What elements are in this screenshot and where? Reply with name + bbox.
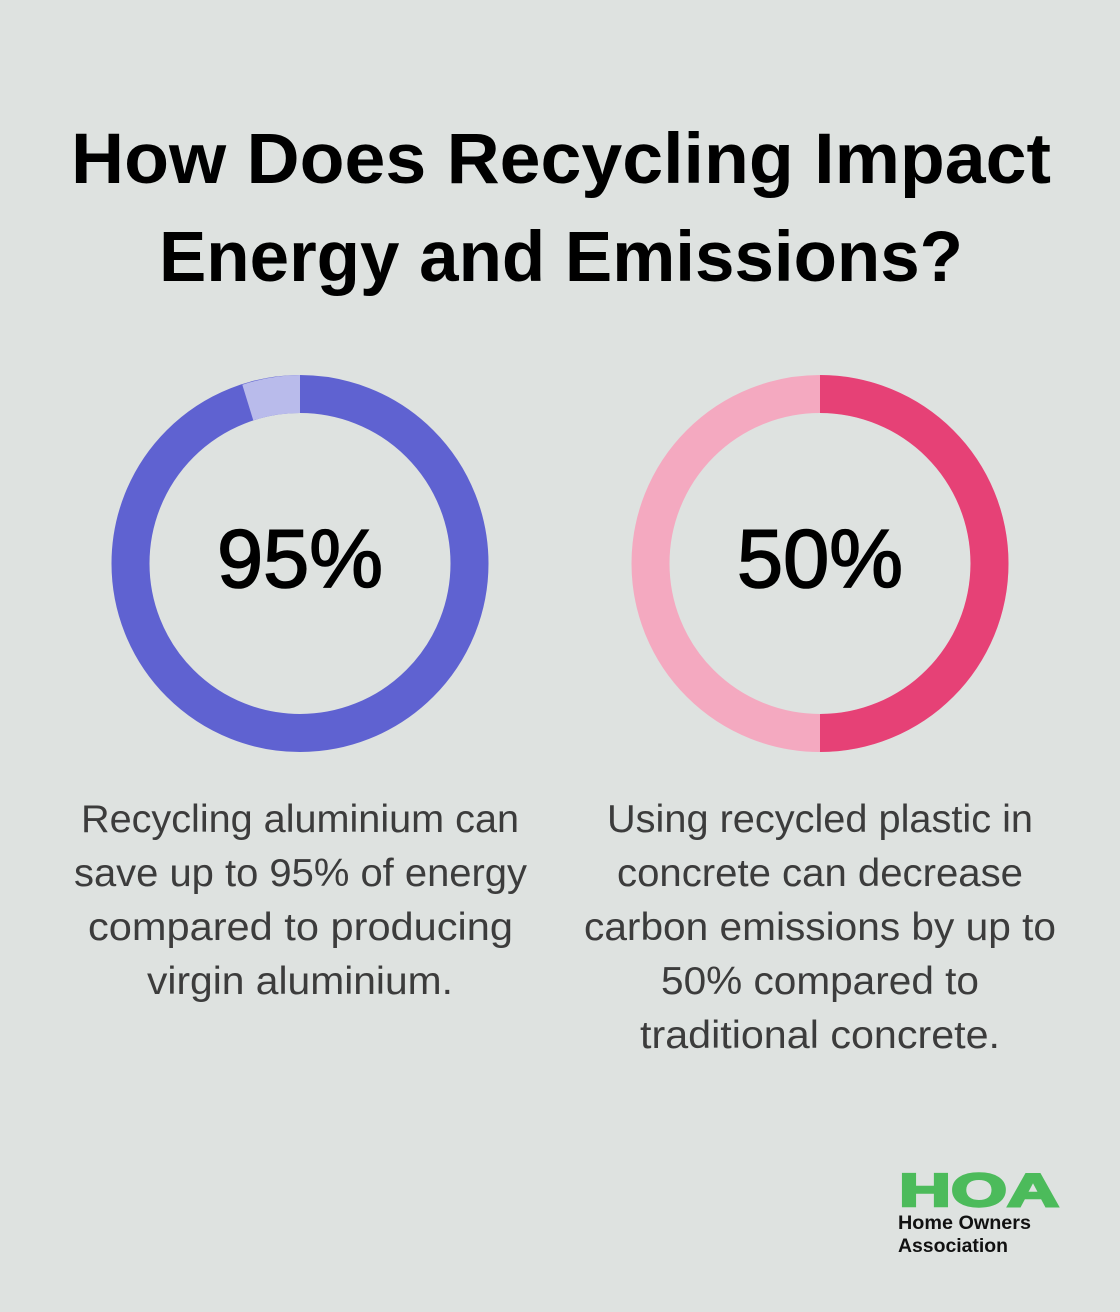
- text block: aluminium: virgin aluminium.: [147, 960, 453, 1003]
- text block: recycled plastic: Using recycled plastic in: [607, 798, 1033, 841]
- filled 50% segment: [820, 375, 1008, 752]
- text block: recycled plastic: carbon emissions by up to: [584, 906, 1056, 949]
- text block: aluminium: compared to producing: [88, 906, 513, 949]
- logo text: Association: [898, 1236, 1008, 1257]
- text block: recycled plastic: traditional concrete.: [640, 1014, 1000, 1057]
- title: Energy and Emissions?: [159, 218, 963, 297]
- title: How Does Recycling Impact: [71, 120, 1051, 199]
- title: [71, 120, 1051, 297]
- text block: aluminium: [74, 798, 528, 1003]
- donut chart: 95%: [130, 375, 470, 733]
- text block: recycled plastic: concrete can decrease: [617, 852, 1023, 895]
- logo: HOA Home Owners Association: [898, 1164, 1059, 1257]
- text block: aluminium: save up to 95% of energy: [74, 852, 528, 895]
- text block: aluminium: Recycling aluminium can: [81, 798, 519, 841]
- text block: recycled plastic: [584, 798, 1056, 1057]
- logo text: Home Owners: [898, 1213, 1031, 1234]
- value: 50%: 50%: [737, 512, 903, 605]
- remaining 5% segment: [242, 375, 300, 420]
- logo text: [898, 1213, 1031, 1257]
- text block: recycled plastic: 50% compared to: [661, 960, 979, 1003]
- logo mark: HOA: HOA: [899, 1164, 1059, 1216]
- donut chart: 50%: [650, 375, 1008, 752]
- value: 95%: 95%: [217, 512, 383, 605]
